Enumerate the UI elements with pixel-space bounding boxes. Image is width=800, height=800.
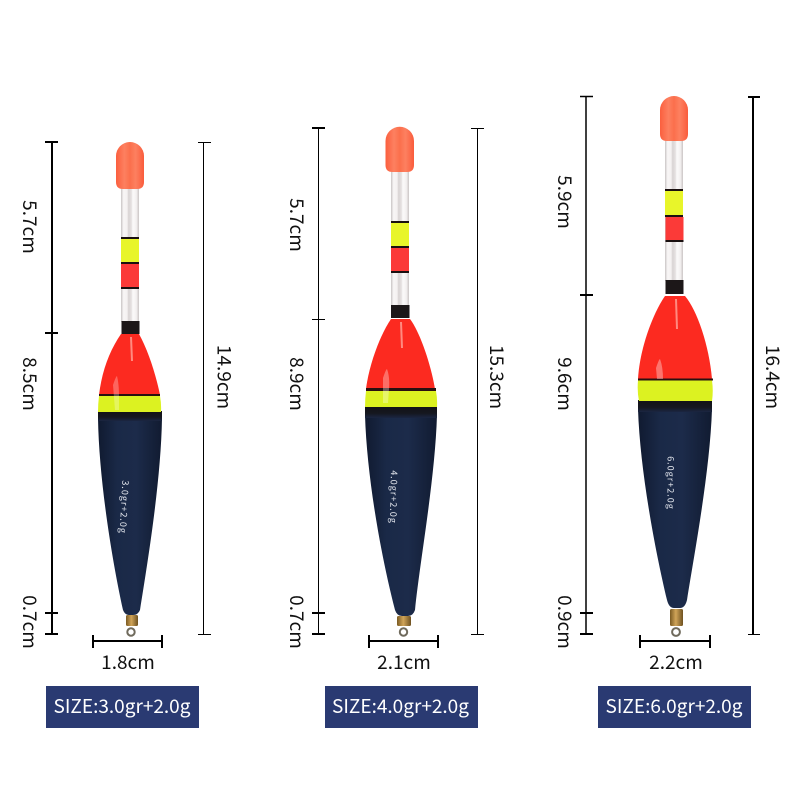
label: 16.4cm: 16.4cm [760,345,787,409]
total length line [471,128,484,634]
size badge [46,686,199,728]
width line [369,635,438,648]
float 2 engraved label: 4.0gr+2.0g [387,470,401,524]
width line [640,635,710,648]
label: 8.5cm: 8.5cm [17,357,44,411]
left dimension line [45,142,58,634]
size badge: SIZE:3.0gr+2.0g [54,692,191,719]
left dimension line [580,96,593,634]
label: 15.3cm: 15.3cm [484,345,511,409]
label: 8.9cm: 8.9cm [284,357,311,411]
float 1 drawing [98,142,162,636]
width line [93,635,162,648]
label: 5.7cm: 5.7cm [17,200,44,254]
label: 14.9cm: 14.9cm [212,345,238,409]
size badge: SIZE:6.0gr+2.0g [606,692,743,719]
label: 0.7cm: 0.7cm [284,595,311,649]
float 1 engraved label: 3.0gr+2.0g [117,480,132,534]
float 3 drawing [638,96,713,636]
size badge [325,686,478,728]
panel: 3.0gr float [17,142,238,728]
size badge [598,686,751,728]
label: 0.7cm: 0.7cm [17,595,44,649]
label: 2.2cm: 2.2cm [649,648,703,675]
label: 0.9cm: 0.9cm [552,595,579,649]
label: 2.1cm: 2.1cm [377,648,431,675]
label: 9.6cm: 9.6cm [552,357,579,411]
total length line [748,97,760,634]
float 2 drawing [365,127,437,636]
left dimension line [312,128,325,634]
panel: 6.0gr float [552,96,787,728]
total length line [198,142,211,634]
label: 5.9cm: 5.9cm [552,175,579,229]
label: 5.7cm: 5.7cm [284,198,311,252]
float 3 engraved label: 6.0gr+2.0g [664,456,678,510]
panel: 4.0gr float [284,127,511,728]
label: 1.8cm: 1.8cm [101,648,155,675]
size badge: SIZE:4.0gr+2.0g [332,692,469,719]
